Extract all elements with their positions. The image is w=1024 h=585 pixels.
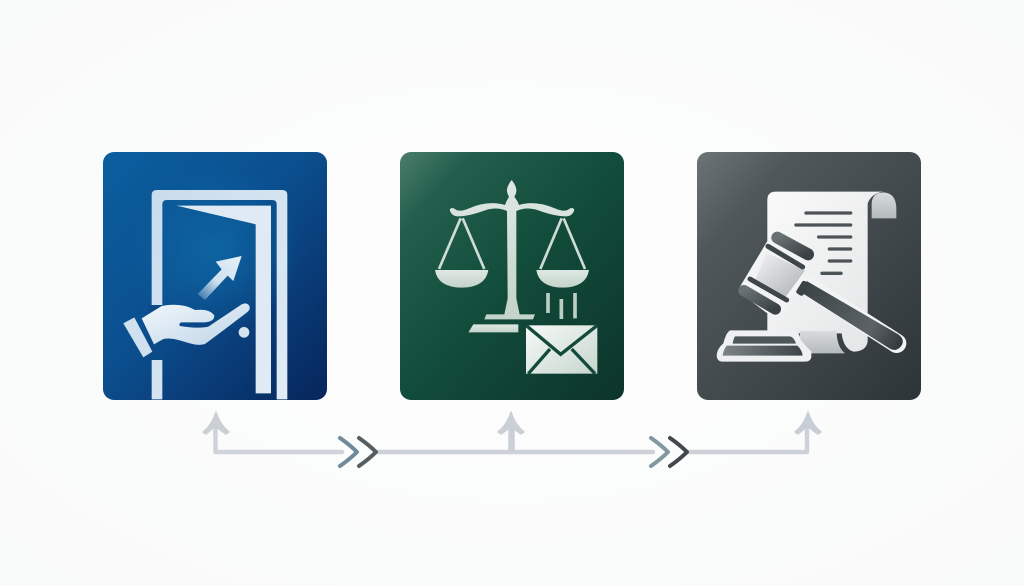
arrow: second chevron pair [651,438,687,466]
icon: motion lines [548,293,575,319]
arrow: process connector from panel 1 to panel 3 [203,412,821,466]
arrow: first chevron pair [340,438,376,466]
arrow: connector line one [216,426,342,452]
icon: open door leaf [177,206,271,393]
arrow: up arrow under panel three [795,412,821,434]
icon: envelope [526,325,597,374]
icon: upward arrow [198,256,242,300]
arrow: connector line three [688,426,807,452]
arrow: up arrow under panel one [203,412,229,434]
icon: text lines [796,213,851,273]
icon: sound block [717,330,811,362]
icon: scroll document [767,192,896,353]
arrow: up arrow under panel two [498,412,524,452]
icon: door frame [152,190,287,399]
icon: scale pan strings [439,218,585,269]
icon: hand [123,303,250,360]
panel: scales of justice with envelope [400,152,624,400]
arrow: connector line two [376,450,653,454]
panel: entry door with offering hand [103,152,327,400]
icon: gavel [738,237,903,350]
panel: gavel and legal scroll [697,152,921,400]
icon: scales of justice [435,180,589,332]
icon: door knob [239,327,249,338]
